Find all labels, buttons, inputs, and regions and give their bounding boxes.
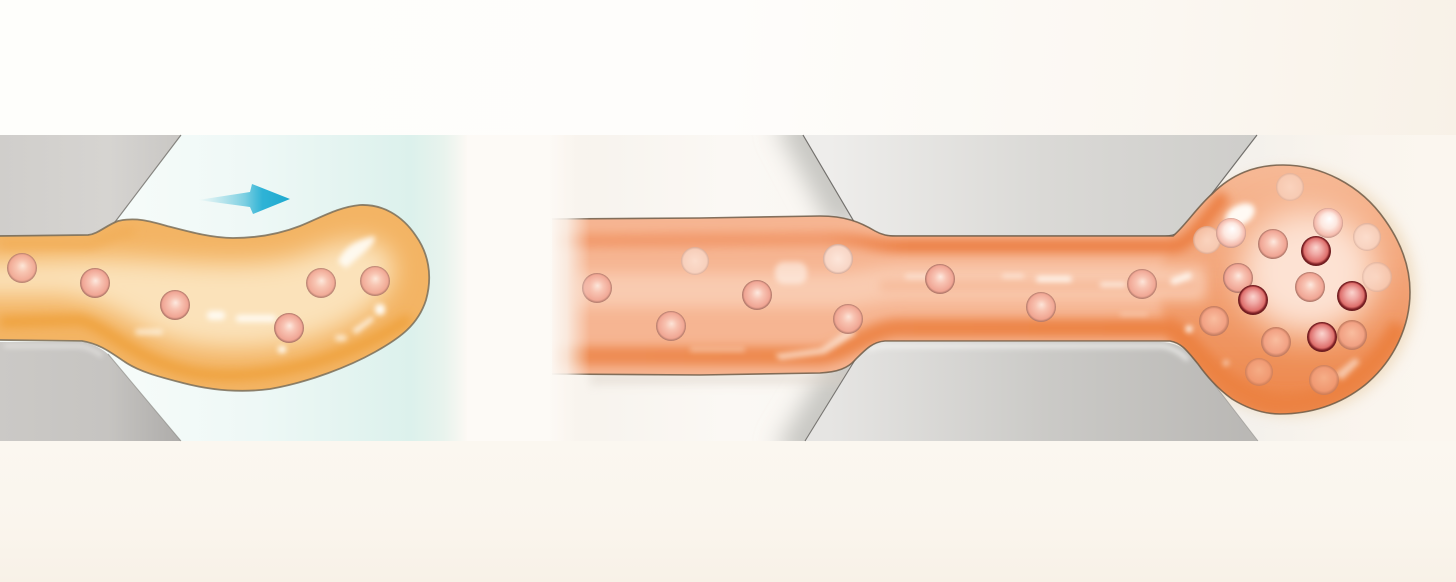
- lower grey plaque wedge: [0, 342, 181, 441]
- panel: open vessel with blue arrow: [0, 135, 467, 441]
- soft wedge shadows: [588, 135, 1421, 441]
- body highlights: [690, 198, 1360, 380]
- bulge shading: [1158, 208, 1410, 414]
- panel: narrowed vessel with bulge: [552, 134, 1428, 442]
- amber vessel body: [0, 205, 429, 391]
- blood cells in open vessel: [7, 253, 390, 343]
- upper grey plaque wedge: [803, 135, 1257, 236]
- body highlights: [135, 236, 385, 353]
- tube shading bands: [550, 195, 1225, 246]
- blood cells crowded in bulge: [1193, 173, 1392, 395]
- blood cells in tube: [582, 244, 1157, 341]
- upper grey plaque wedge: [0, 135, 181, 236]
- orange vessel body and bulge: [550, 162, 1416, 418]
- left fade of tube: [548, 135, 590, 441]
- lower grey plaque wedge: [805, 342, 1258, 441]
- panel background: [550, 135, 1456, 441]
- icon: blue flow arrow: [198, 184, 290, 214]
- panel background: teal tissue: [0, 135, 467, 441]
